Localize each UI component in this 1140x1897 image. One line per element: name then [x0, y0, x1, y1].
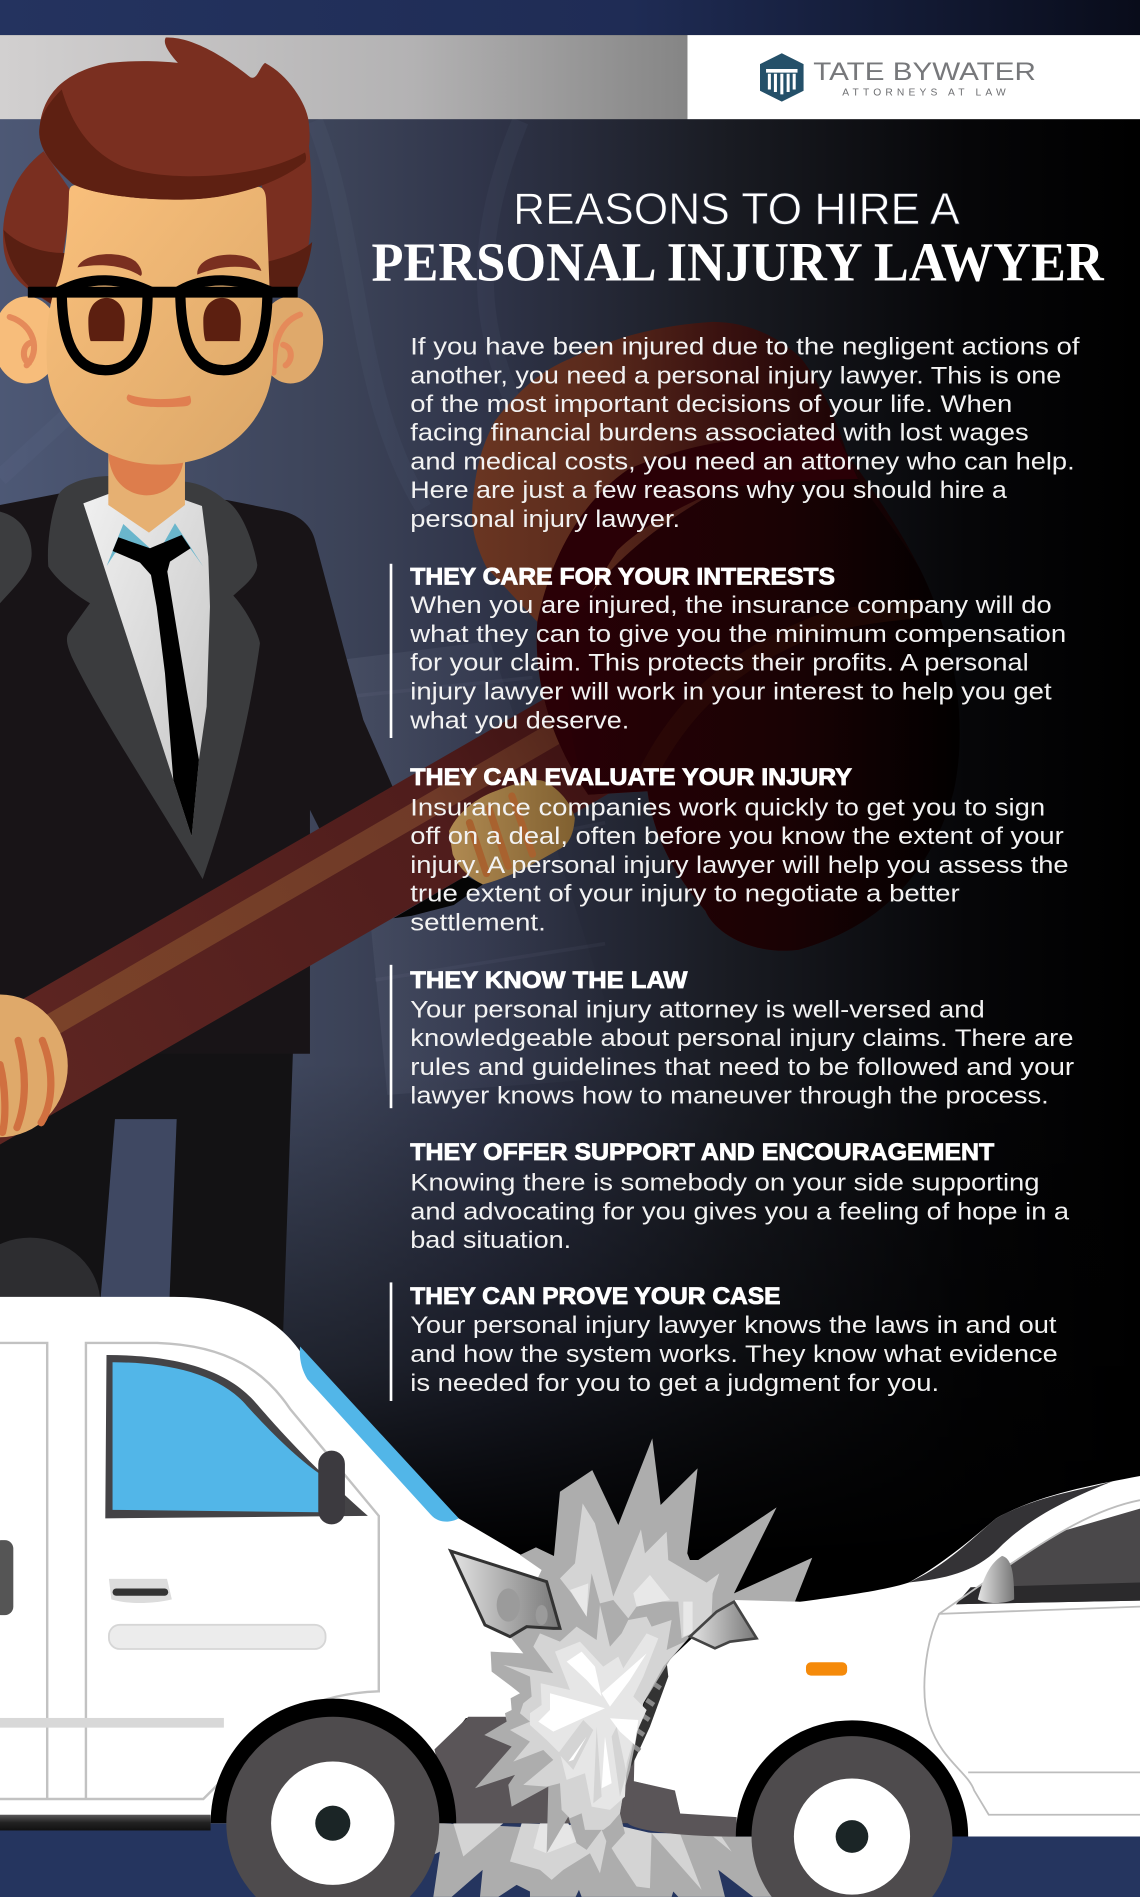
- reason 3: they know the law: THEY KNOW THE LAW: [410, 967, 688, 994]
- explosion rays: [558, 1720, 627, 1803]
- reason 3: they know the law: Your personal injury attorney is well-versed and: [410, 996, 985, 1022]
- explosion upper highlights: [570, 1575, 693, 1637]
- explosion upper flames: [560, 1503, 719, 1638]
- reason 3: they know the law: rules and guidelines that need to be followed and your: [410, 1054, 1074, 1080]
- van windshield strip: [300, 1347, 459, 1522]
- car bent fender: [690, 1602, 757, 1648]
- reason 5: they can prove your case: and how the system works. They know what evidence: [410, 1341, 1058, 1367]
- lawyer figure: [0, 37, 393, 1371]
- reason 5: they can prove your case: is needed for you to get a judgment for you.: [410, 1370, 939, 1396]
- dollar bill backdrop: [345, 641, 629, 1095]
- reason 4: they offer support and encouragement: THEY OFFER SUPPORT AND ENCOURAGEMENT: [410, 1139, 994, 1166]
- intro paragraph: another, you need a personal injury lawyer. This is one: [410, 362, 1061, 388]
- reason 2: they can evaluate your injury: Insurance companies work quickly to get you to sign: [410, 794, 1045, 820]
- intro paragraph: of the most important decisions of your life. When: [410, 391, 1012, 417]
- right ear: [258, 296, 323, 384]
- van window: [105, 1355, 368, 1518]
- grey header band: [0, 35, 687, 119]
- reason 3: they know the law: lawyer knows how to maneuver through the process.: [410, 1083, 1049, 1109]
- car window: [956, 1509, 1140, 1604]
- explosion white core: [538, 1652, 647, 1788]
- logo wordmark: TATE BYWATER: [813, 59, 1036, 86]
- tie: [113, 535, 199, 837]
- reason 1: they care for your interests: what they can to give you the minimum compensation: [409, 621, 1066, 647]
- suit and shirt: [0, 453, 393, 1054]
- quiff shadow: [39, 90, 306, 200]
- reason 4: they offer support and encouragement: Knowing there is somebody on your side supporting: [410, 1169, 1040, 1195]
- eyebrows: [77, 254, 142, 276]
- intro paragraph: personal injury lawyer.: [410, 506, 680, 532]
- intro paragraph: Here are just a few reasons why you should hire a: [410, 477, 1008, 503]
- heading: reasons to hire: REASONS TO HIRE A: [513, 184, 960, 234]
- jacket: [0, 493, 393, 1054]
- reason 2: they can evaluate your injury: injury. A personal injury lawyer will help you assess the: [410, 852, 1069, 878]
- trousers: [0, 1028, 307, 1331]
- reason 4: they offer support and encouragement: bad situation.: [410, 1227, 571, 1253]
- mouth: [127, 394, 191, 407]
- explosion centre: [530, 1633, 658, 1810]
- van door outlines: [0, 1343, 379, 1799]
- navy ground: [0, 1823, 1140, 1897]
- crash explosion: [451, 1438, 812, 1853]
- gavel handle: [0, 594, 726, 1144]
- white car: [620, 1476, 1140, 1837]
- reason 4: they offer support and encouragement: and advocating for you gives you a feeling of hope in a: [410, 1198, 1070, 1224]
- car roof edge: [909, 1481, 1113, 1582]
- reason 1: they care for your interests: for your claim. This protects their profits. A personal: [410, 650, 1029, 676]
- explosion lower burst: [503, 1605, 685, 1830]
- reason 1: they care for your interests: THEY CARE FOR YOUR INTERESTS: [410, 563, 835, 590]
- side hair: [3, 143, 312, 306]
- face: [46, 185, 273, 465]
- reason 3: they know the law: [390, 965, 1074, 1109]
- radiator: [630, 1662, 668, 1767]
- van lower strip: [0, 1815, 211, 1830]
- van bent fender: [451, 1551, 560, 1637]
- gavel head lower body: [567, 479, 960, 951]
- reason 5: they can prove your case: [390, 1282, 1058, 1401]
- neck shadow: [108, 453, 184, 495]
- white van: [0, 1297, 635, 1830]
- reason 4: they offer support and encouragement: [410, 1139, 1070, 1253]
- van belt line: [0, 1718, 224, 1728]
- van door handle: [109, 1579, 172, 1603]
- reason 5: they can prove your case: THEY CAN PROVE YOUR CASE: [410, 1283, 781, 1310]
- car door outline: [924, 1500, 1140, 1815]
- reason 1: they care for your interests: When you are injured, the insurance company will do: [410, 592, 1052, 618]
- van body: [0, 1297, 605, 1823]
- van side trim: [109, 1625, 326, 1649]
- collar tips: [107, 523, 203, 567]
- top navy bar: [0, 0, 1140, 35]
- gavel head dark band: [537, 435, 858, 795]
- car body: [627, 1476, 1140, 1837]
- reason 1: they care for your interests: injury lawyer will work in your interest to help you get: [410, 678, 1052, 704]
- quiff hair: [39, 37, 310, 200]
- van undercarriage: [434, 1717, 635, 1823]
- car indicator: [806, 1662, 847, 1676]
- neck: [108, 453, 185, 533]
- reason 2: they can evaluate your injury: THEY CAN EVALUATE YOUR INJURY: [410, 764, 852, 791]
- intro paragraph: If you have been injured due to the negligent actions of: [410, 333, 1080, 359]
- gavel head: [472, 322, 960, 951]
- knee shadow: [0, 1238, 100, 1371]
- eyes: [88, 298, 125, 341]
- car mirror: [978, 1556, 1014, 1603]
- van mirror: [318, 1451, 345, 1524]
- lapels: [48, 476, 260, 879]
- intro paragraph: and medical costs, you need an attorney who can help.: [410, 448, 1075, 474]
- hand on gavel top: [449, 780, 575, 884]
- reason 1: they care for your interests: what you deserve.: [409, 707, 629, 733]
- reason 5: they can prove your case: Your personal injury lawyer knows the laws in and out: [410, 1312, 1057, 1338]
- reason 2: they can evaluate your injury: [410, 764, 1069, 935]
- reason 1: they care for your interests: [390, 563, 1066, 738]
- car wheel: [736, 1720, 968, 1897]
- logo panel: [687, 35, 1140, 119]
- explosion outer: [475, 1438, 812, 1853]
- van rear handle: [0, 1540, 13, 1615]
- shirt: [83, 494, 210, 837]
- handle stripe: [0, 621, 726, 1068]
- intro paragraph: [410, 333, 1080, 532]
- van wheel: [211, 1699, 456, 1897]
- reason 3: they know the law: knowledgeable about personal injury claims. There are: [410, 1025, 1073, 1051]
- left ear: [0, 296, 61, 384]
- intro paragraph: facing financial burdens associated with lost wages: [410, 420, 1029, 446]
- gap between legs: [98, 1119, 177, 1331]
- heading: personal injury lawyer: PERSONAL INJURY LAWYER: [372, 232, 1105, 293]
- hand on gavel bottom: [0, 994, 68, 1137]
- car bumper: [620, 1780, 737, 1837]
- reason 2: they can evaluate your injury: true extent of your injury to negotiate a better: [410, 880, 960, 906]
- glasses: [28, 280, 298, 370]
- logo tagline: ATTORNEYS AT LAW: [842, 88, 1006, 99]
- reason 2: they can evaluate your injury: settlement.: [410, 909, 546, 935]
- reason 2: they can evaluate your injury: off on a deal, often before you know the extent of your: [410, 823, 1064, 849]
- left sleeve fold: [0, 512, 32, 603]
- crash debris spray on ground: [430, 1823, 773, 1897]
- logo icon: hexagon with columns: [760, 53, 804, 102]
- lawyer sleeve under hand: [393, 876, 483, 918]
- gavel head band: [647, 609, 920, 774]
